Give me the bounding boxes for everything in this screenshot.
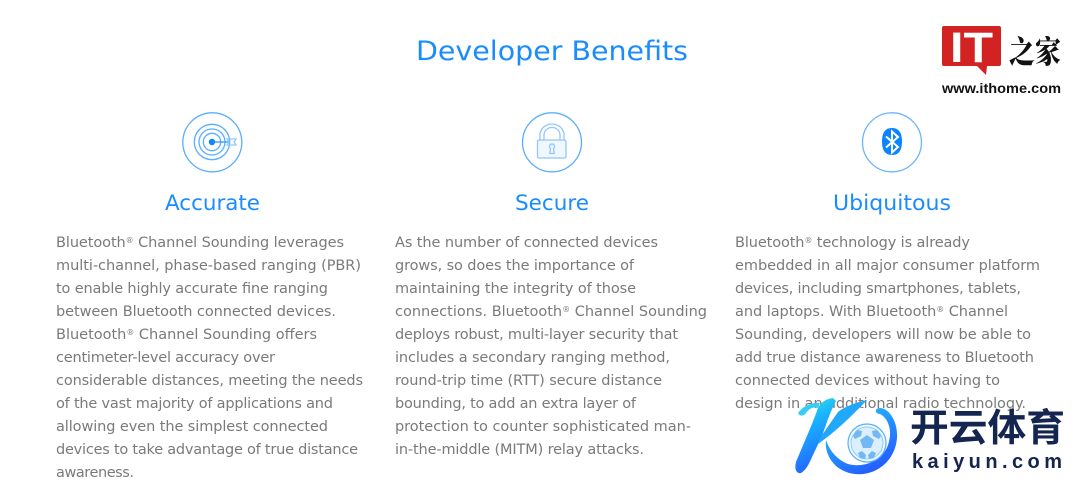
- text block: ubiquitous: add true distance awareness to Bluetooth: [735, 350, 1034, 366]
- logo: kaiyun watermark: 开云体育: [910, 397, 1065, 452]
- text block: ubiquitous: Channel: [944, 304, 1008, 320]
- text block: secure: round-trip time (RTT) secure distance: [395, 373, 662, 389]
- logo: kaiyun watermark: [795, 397, 1065, 474]
- text block: accurate: [56, 235, 363, 481]
- text block: ubiquitous: [735, 235, 1040, 412]
- heading: accurate: Accurate: [165, 191, 260, 215]
- text block: ubiquitous: ®: [936, 305, 944, 314]
- text block: accurate: allowing even the simplest connected: [56, 419, 328, 435]
- text block: accurate: centimeter-level accuracy over: [56, 350, 275, 366]
- text block: secure: connections. Bluetooth: [395, 304, 562, 320]
- text block: secure: in-the-middle (MITM) relay attacks.: [395, 442, 644, 458]
- text block: secure: ®: [562, 305, 570, 314]
- text block: accurate: Bluetooth: [56, 327, 126, 343]
- text block: secure: maintaining the integrity of those: [395, 281, 636, 297]
- icon: target with arrow: [183, 113, 242, 172]
- logo: kaiyun watermark: kaiyun.com: [912, 451, 1062, 473]
- text block: ubiquitous: devices, including smartphones, tablets,: [735, 281, 1021, 297]
- text block: accurate: of the vast majority of applications and: [56, 396, 333, 412]
- text block: ubiquitous: and laptops. With Bluetooth: [735, 304, 936, 320]
- text block: ubiquitous: embedded in all major consumer platform: [735, 258, 1040, 274]
- text block: secure: As the number of connected devices: [395, 235, 658, 251]
- text block: accurate: ®: [126, 328, 134, 337]
- text block: ubiquitous: ®: [804, 236, 812, 245]
- text block: secure: bounding, to add an extra layer of: [395, 396, 637, 412]
- panel: ubiquitous: [735, 113, 1040, 412]
- icon: padlock: [522, 113, 582, 172]
- text block: accurate: ®: [126, 236, 134, 245]
- panel: accurate: [56, 113, 363, 481]
- text block: accurate: Channel Sounding leverages: [134, 235, 344, 251]
- text block: secure: deploys robust, multi-layer security that: [395, 327, 678, 343]
- text block: secure: Channel Sounding: [570, 304, 707, 320]
- text block: ubiquitous: technology is already: [812, 235, 970, 251]
- logo: ithome watermark: [941, 24, 1061, 96]
- text block: ubiquitous: Bluetooth: [735, 235, 804, 251]
- text block: accurate: considerable distances, meeting the needs: [56, 373, 363, 389]
- panel: secure: [395, 113, 707, 458]
- text block: accurate: Channel Sounding offers: [134, 327, 317, 343]
- text block: secure: grows, so does the importance of: [395, 258, 635, 274]
- text block: ubiquitous: connected devices without having to: [735, 373, 1000, 389]
- text block: ubiquitous: design in an additional radio technology.: [735, 396, 1026, 412]
- title: Developer Benefits: [416, 36, 688, 67]
- logo: ithome watermark: www.ithome.com: [941, 80, 1061, 96]
- text block: secure: protection to counter sophisticated man-: [395, 419, 691, 435]
- text block: accurate: awareness.: [56, 465, 134, 481]
- icon: bluetooth: [862, 113, 922, 172]
- heading: ubiquitous: Ubiquitous: [833, 191, 951, 215]
- text block: accurate: to enable highly accurate fine ranging: [56, 281, 328, 297]
- logo: ithome watermark: 之家: [1009, 27, 1061, 72]
- text block: secure: [395, 235, 707, 458]
- text block: accurate: multi-channel, phase-based ranging (PBR): [56, 258, 361, 274]
- text block: accurate: devices to take advantage of true distance: [56, 442, 358, 458]
- text block: accurate: between Bluetooth connected devices.: [56, 304, 336, 320]
- heading: secure: Secure: [515, 191, 589, 215]
- text block: secure: includes a secondary ranging method,: [395, 350, 670, 366]
- logo: ithome watermark: IT: [950, 24, 993, 72]
- text block: accurate: Bluetooth: [56, 235, 126, 251]
- text block: ubiquitous: Sounding, developers will now be able to: [735, 327, 1031, 343]
